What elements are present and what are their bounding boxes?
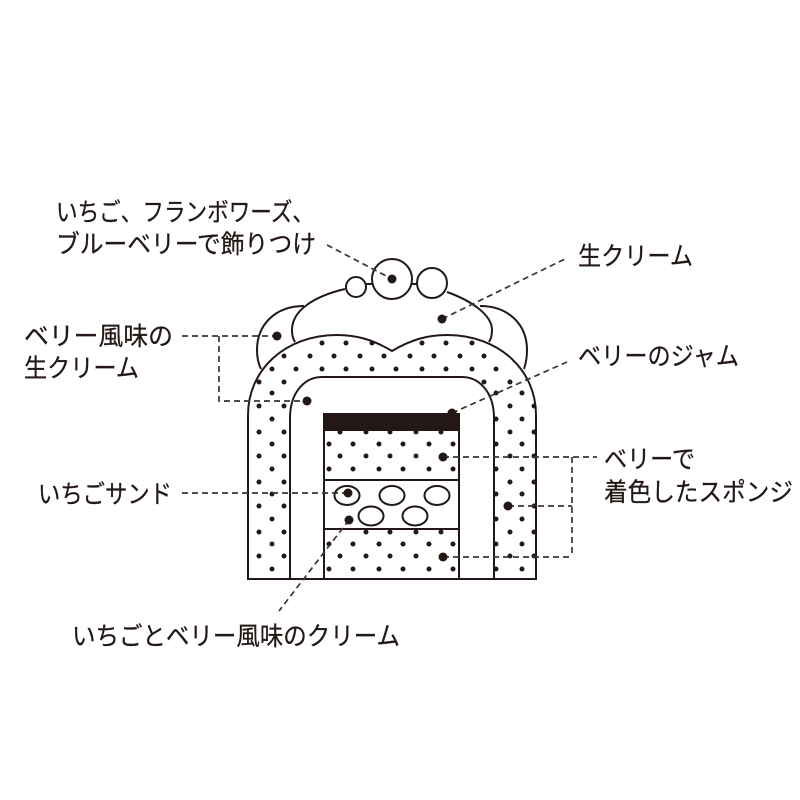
label: berry-flavored fresh cream: 生クリーム [24,355,139,383]
label: fresh cream: 生クリーム [578,243,693,271]
label: berry-colored sponge [604,446,793,507]
berry jam layer [324,414,459,431]
inner cream arch [290,377,494,579]
label: strawberry and berry cream: いちごとベリー風味のクリーム [72,623,400,651]
leader lines [182,245,597,611]
top fresh cream [292,289,492,342]
label: berries decoration [56,199,316,259]
inner sponge layer dots [329,432,453,569]
label: berry jam: ベリーのジャム [578,343,739,371]
label: strawberry sandwich: いちごサンド [38,481,172,509]
label: berry-colored sponge: ベリーで [604,446,695,474]
inner cake block [324,414,459,579]
outer sponge dome [248,335,536,579]
berries on top [346,259,447,299]
label: berry-flavored fresh cream: ベリー風味の [24,323,173,351]
cake diagram [248,259,536,579]
leader end dots [272,274,512,562]
label: berries decoration: ブルーベリーで飾りつけ [56,231,316,259]
label: berry-flavored fresh cream [24,323,173,383]
outer sponge dots [259,343,534,569]
side cream swirls [257,306,527,369]
label: berries decoration: いちご、フランボワーズ、 [56,199,314,227]
strawberry sandwich layer [324,480,459,529]
